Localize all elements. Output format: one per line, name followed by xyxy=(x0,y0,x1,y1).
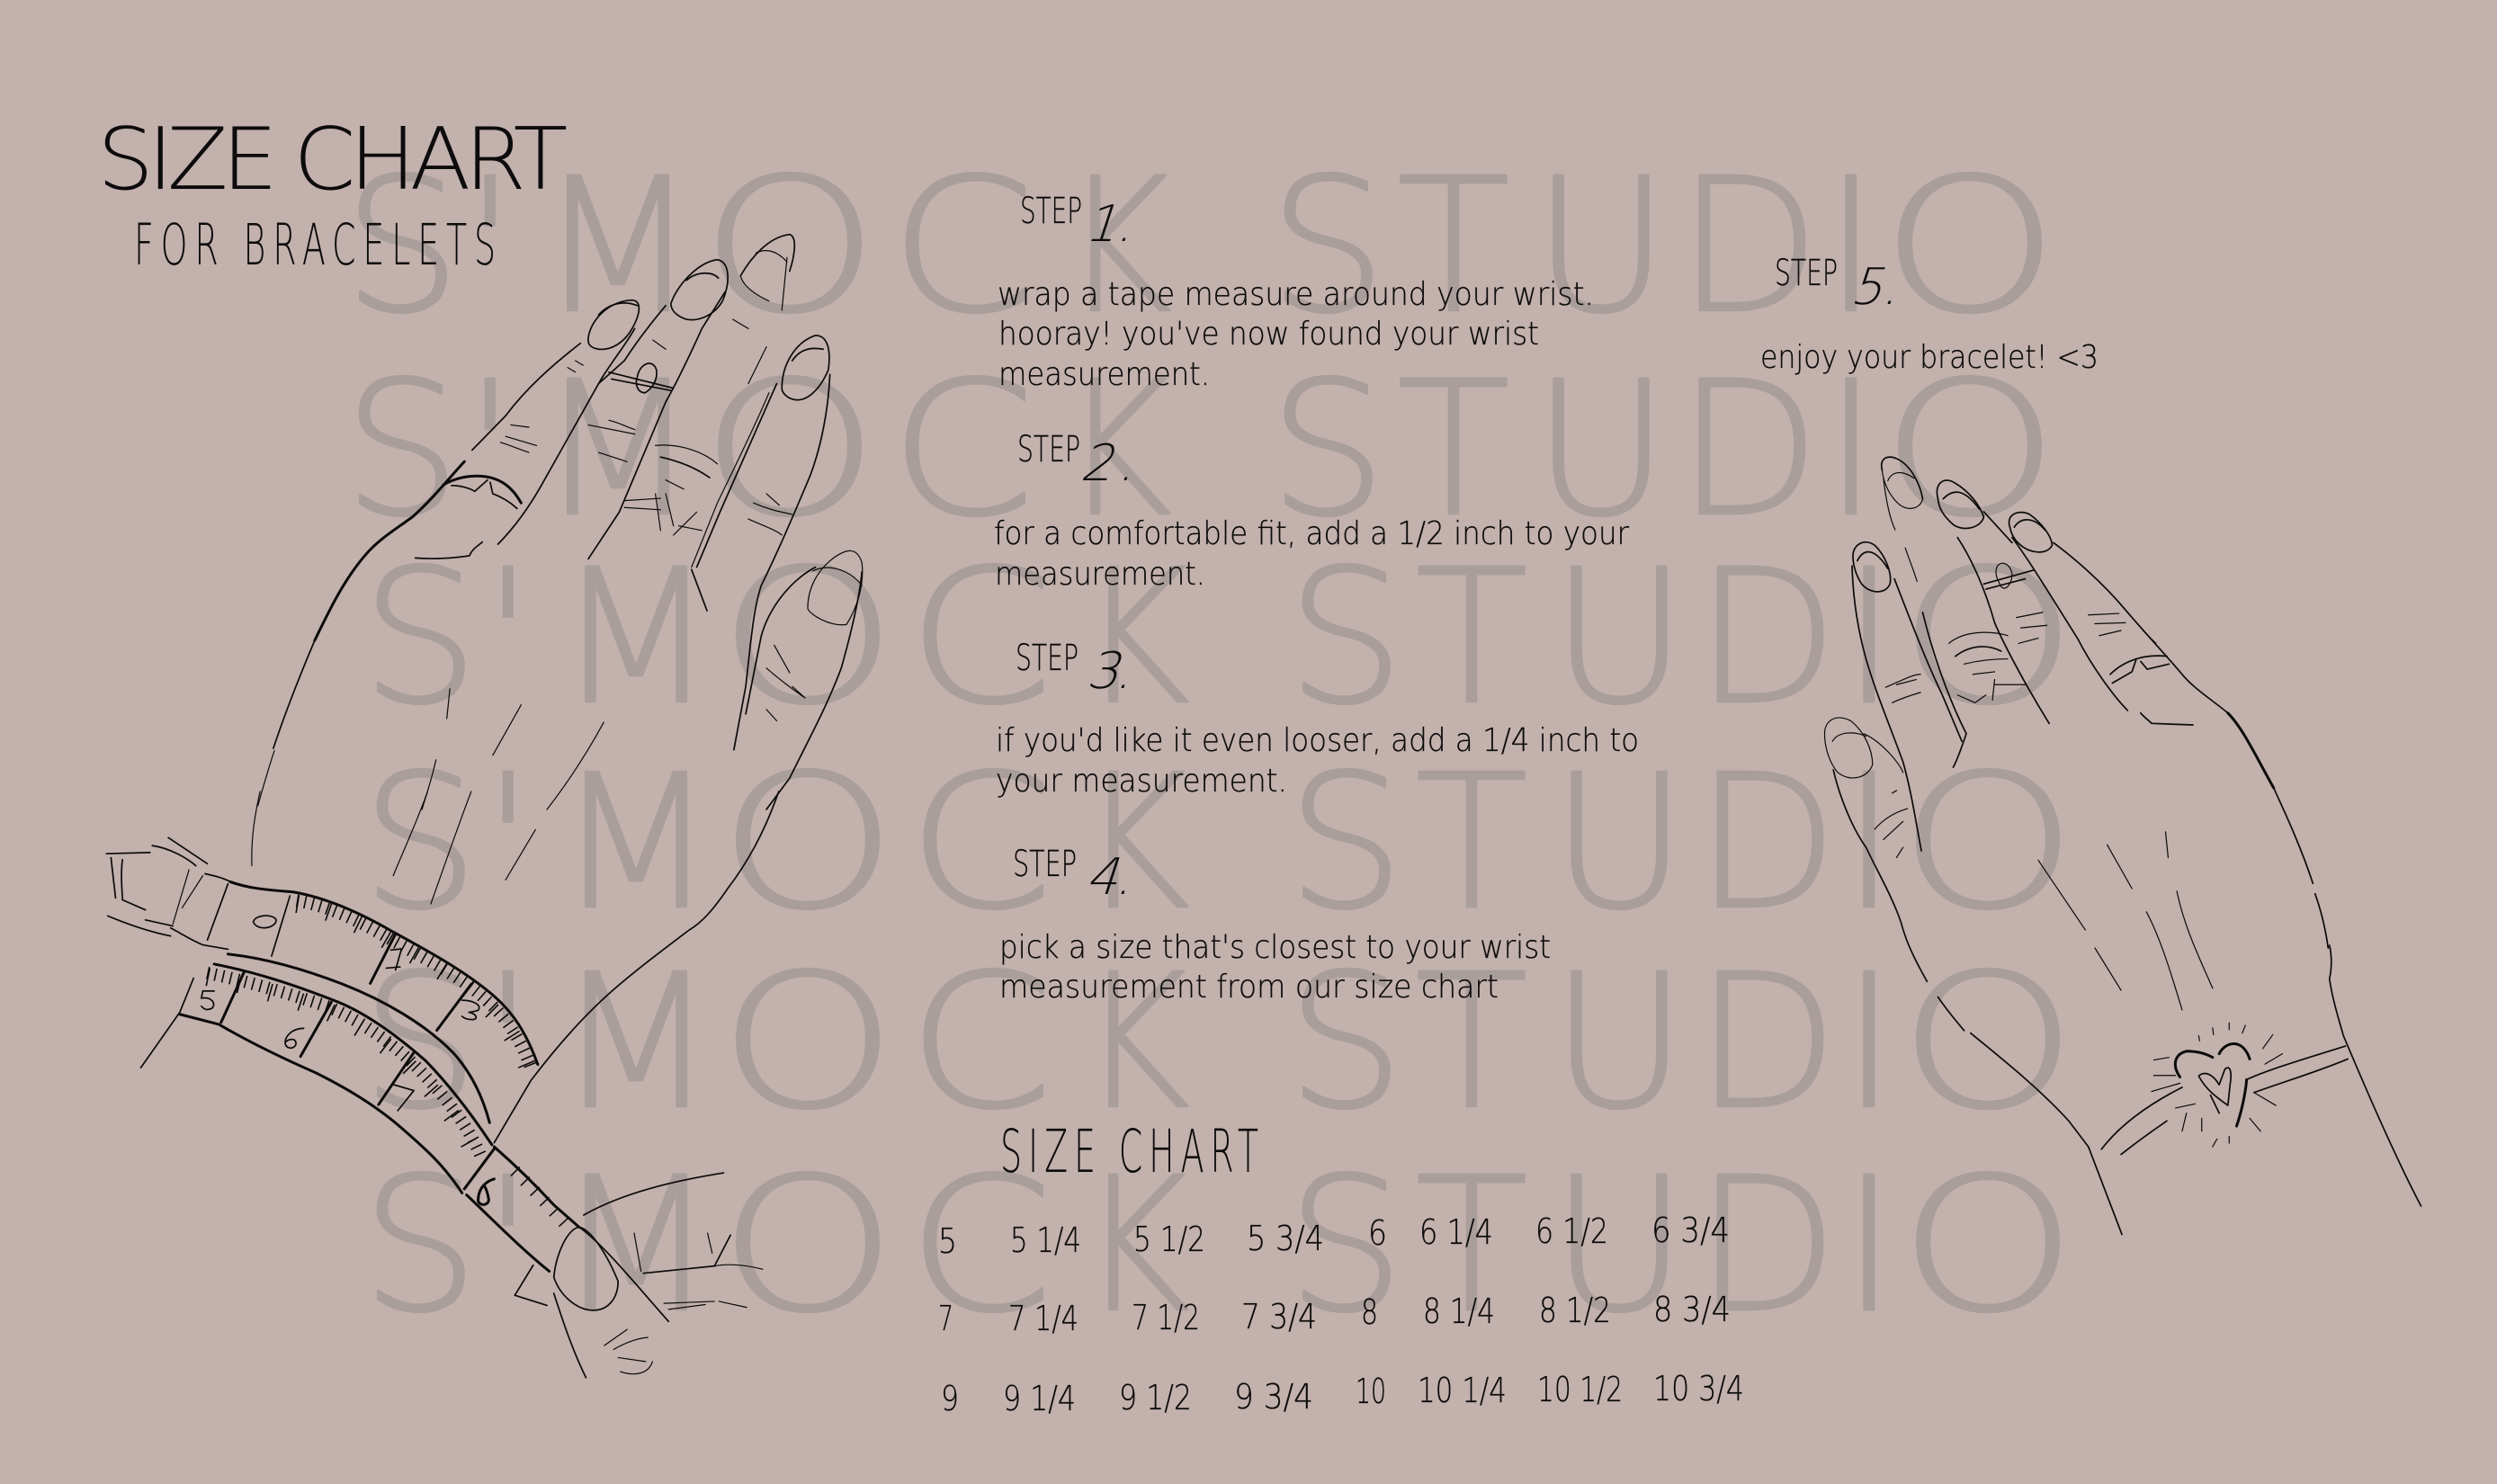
step 1: STEP xyxy=(1020,191,1082,232)
step 2: for a comfortable fit, add a 1/2 inch to your xyxy=(994,515,1629,552)
step 4 xyxy=(999,844,1551,1006)
watermark: repeated studio name: S'M xyxy=(362,735,716,951)
watermark: repeated studio name: STUDI xyxy=(1269,342,1878,558)
watermark: repeated studio name: STUDI xyxy=(1287,934,1896,1150)
step 1 xyxy=(998,191,1594,393)
watermark: repeated studio name: S'M xyxy=(362,530,716,746)
step 2: measurement. xyxy=(995,556,1205,593)
step 3: STEP xyxy=(1016,638,1078,679)
heart bracelet xyxy=(2101,1023,2348,1155)
watermark: repeated studio name: O xyxy=(719,935,897,1150)
watermark: repeated studio name: K xyxy=(1080,1139,1190,1354)
sizes row 2: 8 xyxy=(1361,1292,1378,1332)
watermark: repeated studio name: S'M xyxy=(344,342,698,558)
watermark: repeated studio name: C xyxy=(908,934,1053,1150)
watermark: repeated studio name: STUDI xyxy=(1269,139,1878,354)
sizes row 2: 8 1/4 xyxy=(1423,1292,1495,1331)
watermark: repeated studio name: O xyxy=(719,736,897,951)
step 5: 5. xyxy=(1846,257,1912,317)
watermark: repeated studio name: S'M xyxy=(362,1138,716,1354)
step 2: 2. xyxy=(1076,434,1149,493)
sizes row 2: 7 1/2 xyxy=(1132,1298,1200,1337)
watermark: repeated studio name: STUDI xyxy=(1287,1138,1896,1354)
watermark: repeated studio name: S'M xyxy=(344,139,698,354)
watermark: repeated studio name: O xyxy=(1899,531,2077,746)
watermark: repeated studio name: S'M xyxy=(362,934,716,1150)
size chart heading: SIZE CHART xyxy=(1000,1117,1265,1186)
watermark: repeated studio name: O xyxy=(1899,935,2077,1150)
watermark: repeated studio name: O xyxy=(719,1139,897,1354)
sizes row 2: 7 xyxy=(938,1299,953,1338)
step 3 xyxy=(996,638,1639,800)
sizes row 1: 6 1/4 xyxy=(1419,1212,1493,1252)
step 5 xyxy=(1760,253,2099,376)
watermark: repeated studio name: K xyxy=(1062,343,1172,558)
watermark: repeated studio name: K xyxy=(1080,736,1190,951)
sizes row 1: 6 1/2 xyxy=(1535,1211,1608,1251)
sizes row 1: 5 1/2 xyxy=(1133,1220,1205,1259)
sizes row 1: 6 3/4 xyxy=(1651,1211,1730,1250)
left hand: fingers and back of hand xyxy=(258,235,863,809)
step 2: STEP xyxy=(1017,429,1080,470)
step 4: 4. xyxy=(1081,847,1146,907)
sizes row 3: 10 xyxy=(1356,1372,1386,1411)
step 4: STEP xyxy=(1013,844,1077,885)
sizes row 3: 10 1/4 xyxy=(1418,1371,1507,1410)
watermark: repeated studio name: C xyxy=(908,530,1053,746)
watermark: repeated studio name: C xyxy=(890,342,1035,558)
sizes row 1: 5 xyxy=(938,1221,957,1261)
size chart table xyxy=(938,1211,1744,1418)
watermark: repeated studio name: O xyxy=(1881,343,2059,558)
watermark: repeated studio name xyxy=(344,139,2077,1354)
title: FOR BRACELETS xyxy=(134,212,503,278)
sizes row 3: 9 1/4 xyxy=(1003,1379,1076,1418)
watermark: repeated studio name: O xyxy=(1899,1139,2077,1354)
illustration: left hand measuring wrist with tape xyxy=(106,235,863,1378)
sizes row 3: 9 1/2 xyxy=(1119,1378,1192,1417)
step 1: 1. xyxy=(1080,194,1147,254)
sizes row 3: 10 1/2 xyxy=(1537,1370,1623,1409)
step 3: if you'd like it even looser, add a 1/4 inch to xyxy=(996,722,1639,759)
sizes row 2 xyxy=(938,1290,1731,1338)
step 5: enjoy your bracelet! <3 xyxy=(1760,339,2099,376)
right hand fingers and back of hand xyxy=(1824,457,2421,1235)
title: SIZE CHART xyxy=(97,111,566,210)
sizes row 1: 5 1/4 xyxy=(1010,1220,1081,1260)
sizes row 3: 9 3/4 xyxy=(1234,1377,1313,1417)
watermark: repeated studio name: K xyxy=(1080,935,1190,1150)
step 2 xyxy=(994,429,1629,593)
watermark: repeated studio name: O xyxy=(1899,736,2077,951)
sizes row 1: 6 xyxy=(1368,1213,1387,1253)
watermark: repeated studio name: C xyxy=(908,735,1053,951)
watermark: repeated studio name: O xyxy=(1881,139,2059,354)
sizes row 1 xyxy=(938,1211,1730,1261)
step 3: your measurement. xyxy=(996,763,1287,800)
step 1: wrap a tape measure around your wrist. xyxy=(998,276,1594,313)
sizes row 2: 7 1/4 xyxy=(1008,1299,1078,1338)
sizes row 2: 7 3/4 xyxy=(1241,1297,1317,1336)
watermark: repeated studio name: O xyxy=(719,531,897,746)
step 4: measurement from our size chart xyxy=(999,969,1499,1006)
title xyxy=(97,111,566,278)
step 4: pick a size that's closest to your wrist xyxy=(999,929,1551,966)
sizes row 2: 8 1/2 xyxy=(1539,1291,1611,1330)
sizes row 3 xyxy=(941,1369,1744,1418)
step 1: hooray! you've now found your wrist xyxy=(998,316,1539,353)
watermark: repeated studio name: O xyxy=(701,139,879,354)
watermark: repeated studio name: K xyxy=(1062,139,1172,354)
measuring tape around wrist xyxy=(106,791,779,1378)
step 3: 3. xyxy=(1082,641,1146,701)
watermark: repeated studio name: C xyxy=(890,139,1035,354)
illustration: right hand wearing heart bracelet xyxy=(1824,457,2421,1235)
sizes row 1: 5 3/4 xyxy=(1247,1219,1324,1258)
watermark: repeated studio name: C xyxy=(908,1138,1053,1354)
step 1: measurement. xyxy=(998,356,1210,393)
watermark: repeated studio name: O xyxy=(701,343,879,558)
watermark: repeated studio name: STUDI xyxy=(1287,530,1896,746)
watermark: repeated studio name: K xyxy=(1080,531,1190,746)
sizes row 3: 9 xyxy=(941,1379,959,1418)
watermark: repeated studio name: STUDI xyxy=(1287,735,1896,951)
sizes row 2: 8 3/4 xyxy=(1653,1290,1731,1329)
sizes row 3: 10 3/4 xyxy=(1653,1369,1744,1408)
step 5: STEP xyxy=(1775,253,1838,294)
